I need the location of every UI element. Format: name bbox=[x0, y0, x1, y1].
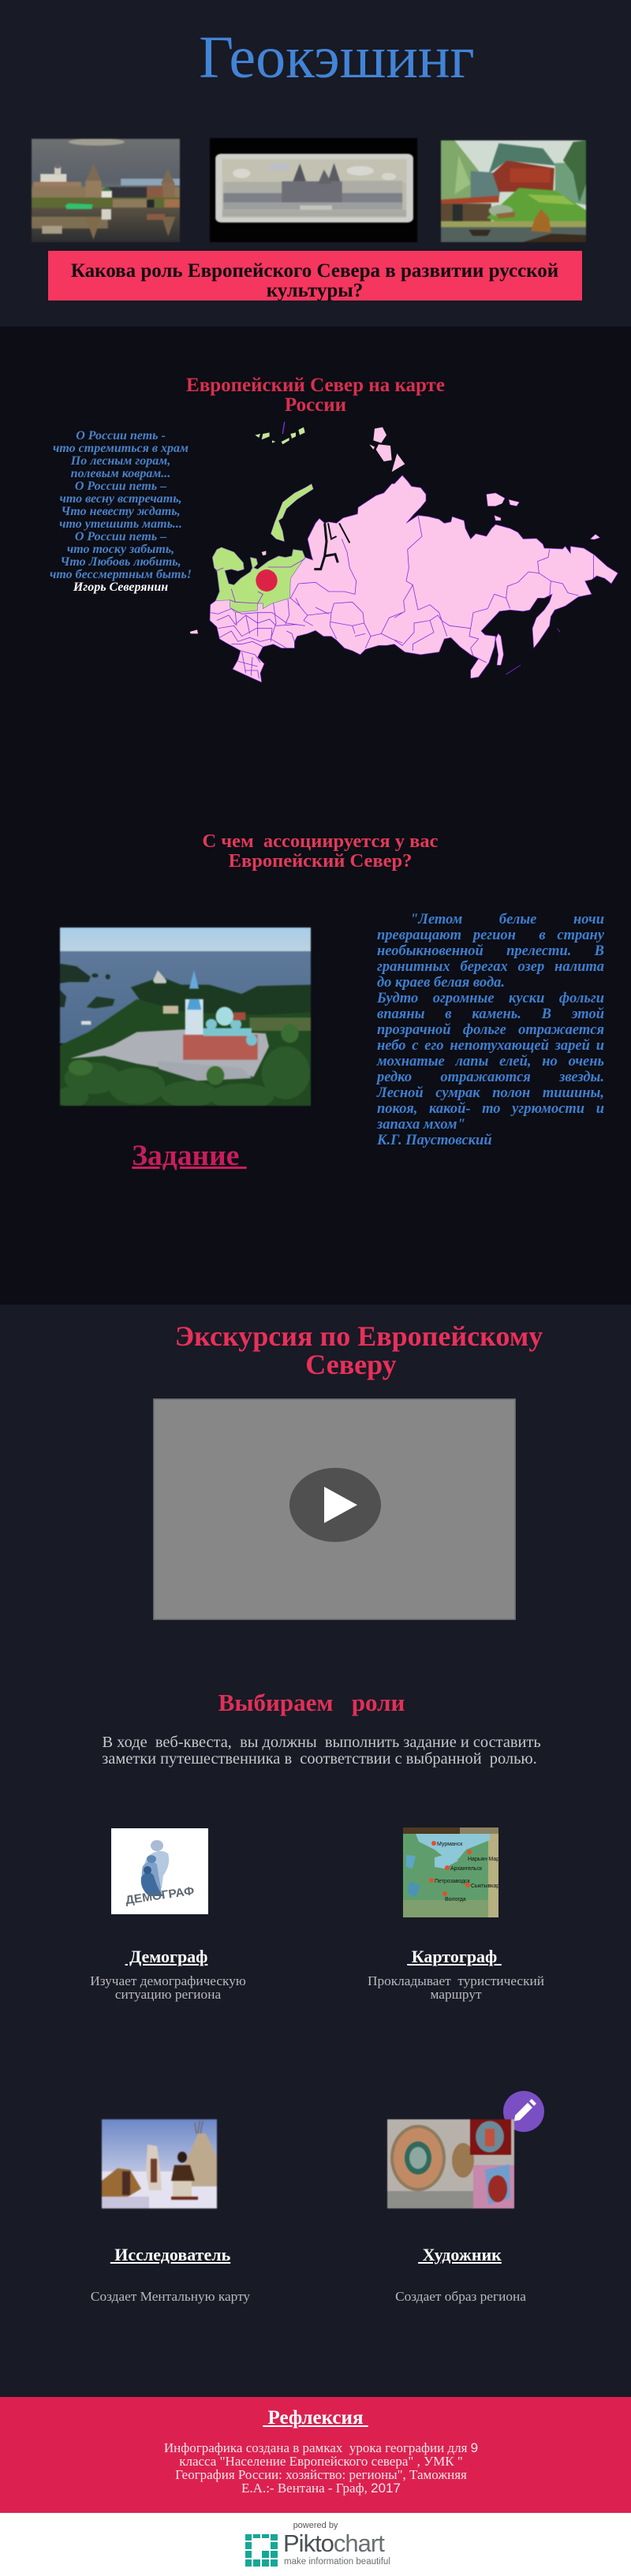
poem: что стремиться в храм bbox=[53, 442, 189, 455]
poem: что тоску забыть, bbox=[67, 543, 174, 556]
video player bbox=[153, 1398, 516, 1620]
role card: cartographer bbox=[368, 1827, 544, 2002]
role description: Создает образ региона bbox=[395, 2289, 526, 2304]
marker: European North bbox=[256, 569, 278, 592]
image: Valaam monastery bbox=[59, 927, 312, 1107]
Kolguev bbox=[262, 551, 266, 555]
image: regional map: Архангельск bbox=[450, 1866, 483, 1872]
poem: Игорь Северянин bbox=[73, 581, 168, 594]
credits text: География России: хозяйство: регионы", Таможняя bbox=[175, 2467, 467, 2482]
wordmark: Piktochart bbox=[283, 2529, 384, 2557]
heading: roles: Выбираем роли bbox=[218, 1689, 405, 1716]
quote: Paustovsky: редко отражаются звезды. bbox=[377, 1070, 604, 1085]
role name: Картограф bbox=[412, 1947, 497, 1966]
image: Solovetsky monastery bbox=[31, 138, 181, 242]
poem: что бессмертным быть! bbox=[50, 568, 192, 581]
heading: map: Европейский Север на карте bbox=[186, 375, 445, 396]
quote: Paustovsky: мохнатые лапы елей, но очень bbox=[377, 1054, 604, 1070]
title: Геокэшинг bbox=[199, 24, 475, 91]
panel: hero header bbox=[0, 0, 631, 327]
quote: Paustovsky: небо с его непотухающей зарей и bbox=[377, 1038, 604, 1054]
heading: map bbox=[186, 375, 445, 416]
panel: map and associations bbox=[0, 327, 631, 1305]
panel: excursion and roles bbox=[0, 1305, 631, 2397]
role card: artist bbox=[386, 2091, 544, 2304]
bays bbox=[314, 523, 338, 569]
logo icon bbox=[245, 2534, 278, 2567]
image: regional map: Мурманск bbox=[437, 1842, 463, 1847]
powered by: powered by bbox=[293, 2521, 338, 2530]
image: regional map bbox=[403, 1827, 498, 1917]
quote: Paustovsky: впаяны в камень. В этой bbox=[377, 1006, 604, 1022]
icon: pencil badge bbox=[503, 2091, 544, 2132]
poem: О России петь – bbox=[75, 480, 166, 493]
poem: По лесным горам, bbox=[71, 454, 170, 468]
credits text: Е.А.:- Вентана - Граф, 2017 bbox=[241, 2481, 401, 2496]
heading: excursion bbox=[175, 1320, 543, 1380]
poem: что утешить мать... bbox=[59, 517, 182, 531]
quote: Paustovsky: превращают регион в страну bbox=[377, 928, 604, 943]
quote: Paustovsky: до краев белая вода. bbox=[377, 975, 505, 991]
task link: Задание bbox=[132, 1140, 239, 1172]
map of Russia bbox=[189, 421, 618, 683]
poem: что весну встречать, bbox=[59, 492, 182, 506]
quote: Paustovsky: "Летом белые ночи bbox=[410, 912, 604, 928]
heading: associations: Европейский Север? bbox=[229, 850, 412, 872]
Wrangel island bbox=[590, 534, 600, 539]
quote: Paustovsky: запаха мхом" bbox=[377, 1117, 465, 1133]
European North region bbox=[212, 547, 305, 613]
Severnaya Zemlya bbox=[369, 427, 405, 472]
image: regional map: Петрозаводск bbox=[435, 1879, 471, 1884]
heading: excursion: Экскурсия по Европейскому bbox=[175, 1320, 543, 1352]
mainland bbox=[210, 476, 618, 682]
quote: Paustovsky: К.Г. Паустовский bbox=[377, 1133, 492, 1148]
poem: О России петь – bbox=[75, 530, 166, 543]
image: regional map: Вологда bbox=[445, 1897, 466, 1902]
quote: Paustovsky: необыкновенной прелести. В bbox=[377, 943, 604, 959]
heading: associations bbox=[202, 831, 439, 872]
Sakhalin bbox=[495, 633, 503, 665]
role name: Художник bbox=[423, 2245, 502, 2264]
role name: Исследователь bbox=[114, 2245, 230, 2264]
intro text bbox=[102, 1734, 541, 1768]
image: northern nomads bbox=[101, 2119, 218, 2209]
poem: полевым коврам... bbox=[71, 467, 170, 480]
quote: Paustovsky: гранитных берегах озер налита bbox=[377, 959, 604, 975]
play button bbox=[289, 1468, 381, 1542]
role card: researcher bbox=[91, 2099, 540, 2304]
poem bbox=[50, 429, 192, 594]
Kaliningrad bbox=[190, 629, 198, 633]
role description: Изучает демографическую bbox=[90, 1973, 246, 1988]
poem: О России петь - bbox=[76, 429, 166, 442]
question banner bbox=[48, 251, 582, 301]
role description bbox=[90, 1973, 246, 2002]
image: regional map: Нарьян-Мар bbox=[468, 1857, 498, 1862]
tagline: make information beautiful bbox=[284, 2557, 390, 2567]
Novaya Zemlya bbox=[271, 483, 313, 542]
image: demographer logo bbox=[111, 1828, 208, 1914]
image: demographer logo: ДЕМОГРАФ bbox=[125, 1884, 196, 1907]
role card: demographer bbox=[90, 1828, 536, 2130]
quote: Paustovsky: покоя, какой- то угрюмости и bbox=[377, 1101, 604, 1117]
question banner: Какова роль Европейского Севера в развитии русской bbox=[71, 260, 558, 282]
heading: reflection: Рефлексия bbox=[268, 2407, 363, 2429]
quote: Paustovsky: прозрачной фольге отражается bbox=[377, 1022, 604, 1038]
role description: Прокладывает туристический bbox=[368, 1973, 544, 1988]
heading: associations: С чем ассоциируется у вас bbox=[202, 831, 439, 852]
Franz Josef Land bbox=[255, 422, 305, 444]
quote: Paustovsky: Будто огромные куски фольги bbox=[377, 991, 604, 1006]
intro text: В ходе веб-квеста, вы должны выполнить задание и составить bbox=[102, 1734, 541, 1751]
image: engraved silver box bbox=[210, 137, 418, 243]
role description: ситуацию региона bbox=[115, 1987, 221, 2002]
poem: Что невесту ждать, bbox=[61, 505, 181, 518]
New Siberian islands bbox=[487, 493, 505, 506]
role description: маршрут bbox=[430, 1987, 482, 2002]
role description bbox=[368, 1973, 544, 2002]
credits text bbox=[164, 2440, 478, 2496]
intro text: заметки путешественника в соответствии с выбранной ролью. bbox=[102, 1750, 537, 1768]
question banner: культуры? bbox=[267, 280, 363, 301]
image: decorative enamel collage bbox=[386, 2119, 515, 2209]
role name: Демограф bbox=[129, 1947, 207, 1966]
quote: Paustovsky bbox=[375, 912, 604, 1148]
quote: Paustovsky: Лесной сумрак полон тишины, bbox=[377, 1085, 604, 1101]
regional borders bbox=[211, 539, 402, 678]
credits text: Инфографика создана в рамках урока географии для 9 bbox=[164, 2440, 478, 2455]
credits text: класса "Население Европейского севера" , УМК " bbox=[179, 2454, 463, 2469]
poem: Что Любовь любить, bbox=[60, 555, 181, 569]
image: painted wooden palace bbox=[440, 140, 587, 243]
panel: Piktochart branding bbox=[0, 2513, 631, 2576]
role description: Создает Ментальную карту bbox=[91, 2289, 250, 2304]
heading: map: России bbox=[285, 394, 346, 416]
panel: reflection footer bbox=[0, 2397, 631, 2513]
heading: excursion: Северу bbox=[305, 1349, 397, 1380]
